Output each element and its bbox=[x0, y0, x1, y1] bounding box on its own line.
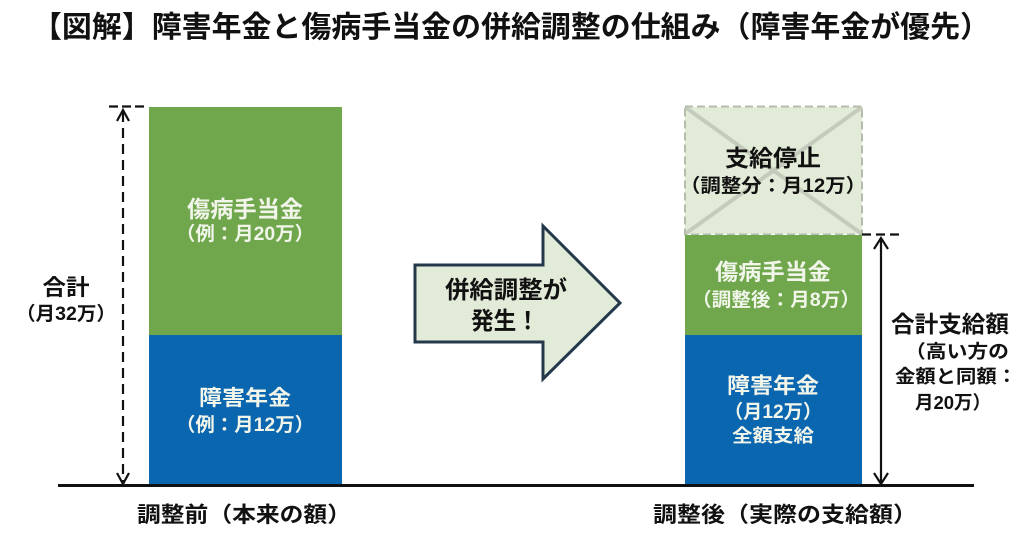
baseline bbox=[58, 484, 974, 487]
total label: 合計 bbox=[42, 275, 90, 300]
bar segment: suspended portion: （調整分：月12万） bbox=[680, 175, 866, 197]
bar segment: suspended portion bbox=[680, 106, 866, 234]
bar segment: sickness allowance: 傷病手当金 bbox=[187, 196, 303, 222]
arrow: concurrent adjustment occurs: 併給調整が bbox=[445, 276, 567, 304]
bar segment: disability pension full: 全額支給 bbox=[732, 426, 814, 446]
bar segment: disability pension full: （月12万） bbox=[724, 401, 822, 423]
total paid label: （高い方の bbox=[905, 341, 1009, 362]
bar segment: disability pension: 障害年金 bbox=[199, 387, 291, 410]
bar segment: reduced sickness allowance: （調整後：月8万） bbox=[692, 289, 860, 311]
total label bbox=[16, 275, 116, 325]
total paid label: 金額と同額： bbox=[895, 366, 1017, 387]
bar segment: suspended portion: 支給停止 bbox=[725, 145, 821, 171]
bar segment: reduced sickness allowance: 傷病手当金 bbox=[715, 260, 831, 285]
title: 【図解】障害年金と傷病手当金の併給調整の仕組み（障害年金が優先） bbox=[32, 10, 990, 44]
arrow: concurrent adjustment occurs: 発生！ bbox=[471, 308, 539, 335]
panel: before adjustment bbox=[16, 106, 351, 527]
bar segment: sickness allowance bbox=[149, 107, 342, 335]
panel: after adjustment bbox=[653, 106, 1017, 527]
bar segment: reduced sickness allowance bbox=[685, 235, 862, 335]
total paid arrow bbox=[862, 234, 901, 484]
label: before adjustment: 調整前（本来の額） bbox=[137, 503, 351, 527]
bar segment: disability pension bbox=[149, 335, 342, 485]
total label: （月32万） bbox=[16, 303, 116, 325]
label: after adjustment: 調整後（実際の支給額） bbox=[653, 503, 917, 527]
total paid label bbox=[891, 311, 1017, 413]
total paid label: 合計支給額 bbox=[891, 311, 1009, 337]
total paid label: 月20万） bbox=[915, 392, 991, 413]
bar segment: disability pension full bbox=[685, 335, 862, 485]
bar segment: disability pension full: 障害年金 bbox=[727, 374, 820, 398]
bar segment: sickness allowance: （例：月20万） bbox=[176, 223, 314, 245]
bar segment: disability pension: （例：月12万） bbox=[176, 414, 314, 436]
dashed total arrow bbox=[109, 106, 148, 484]
arrow: concurrent adjustment occurs bbox=[415, 226, 620, 379]
